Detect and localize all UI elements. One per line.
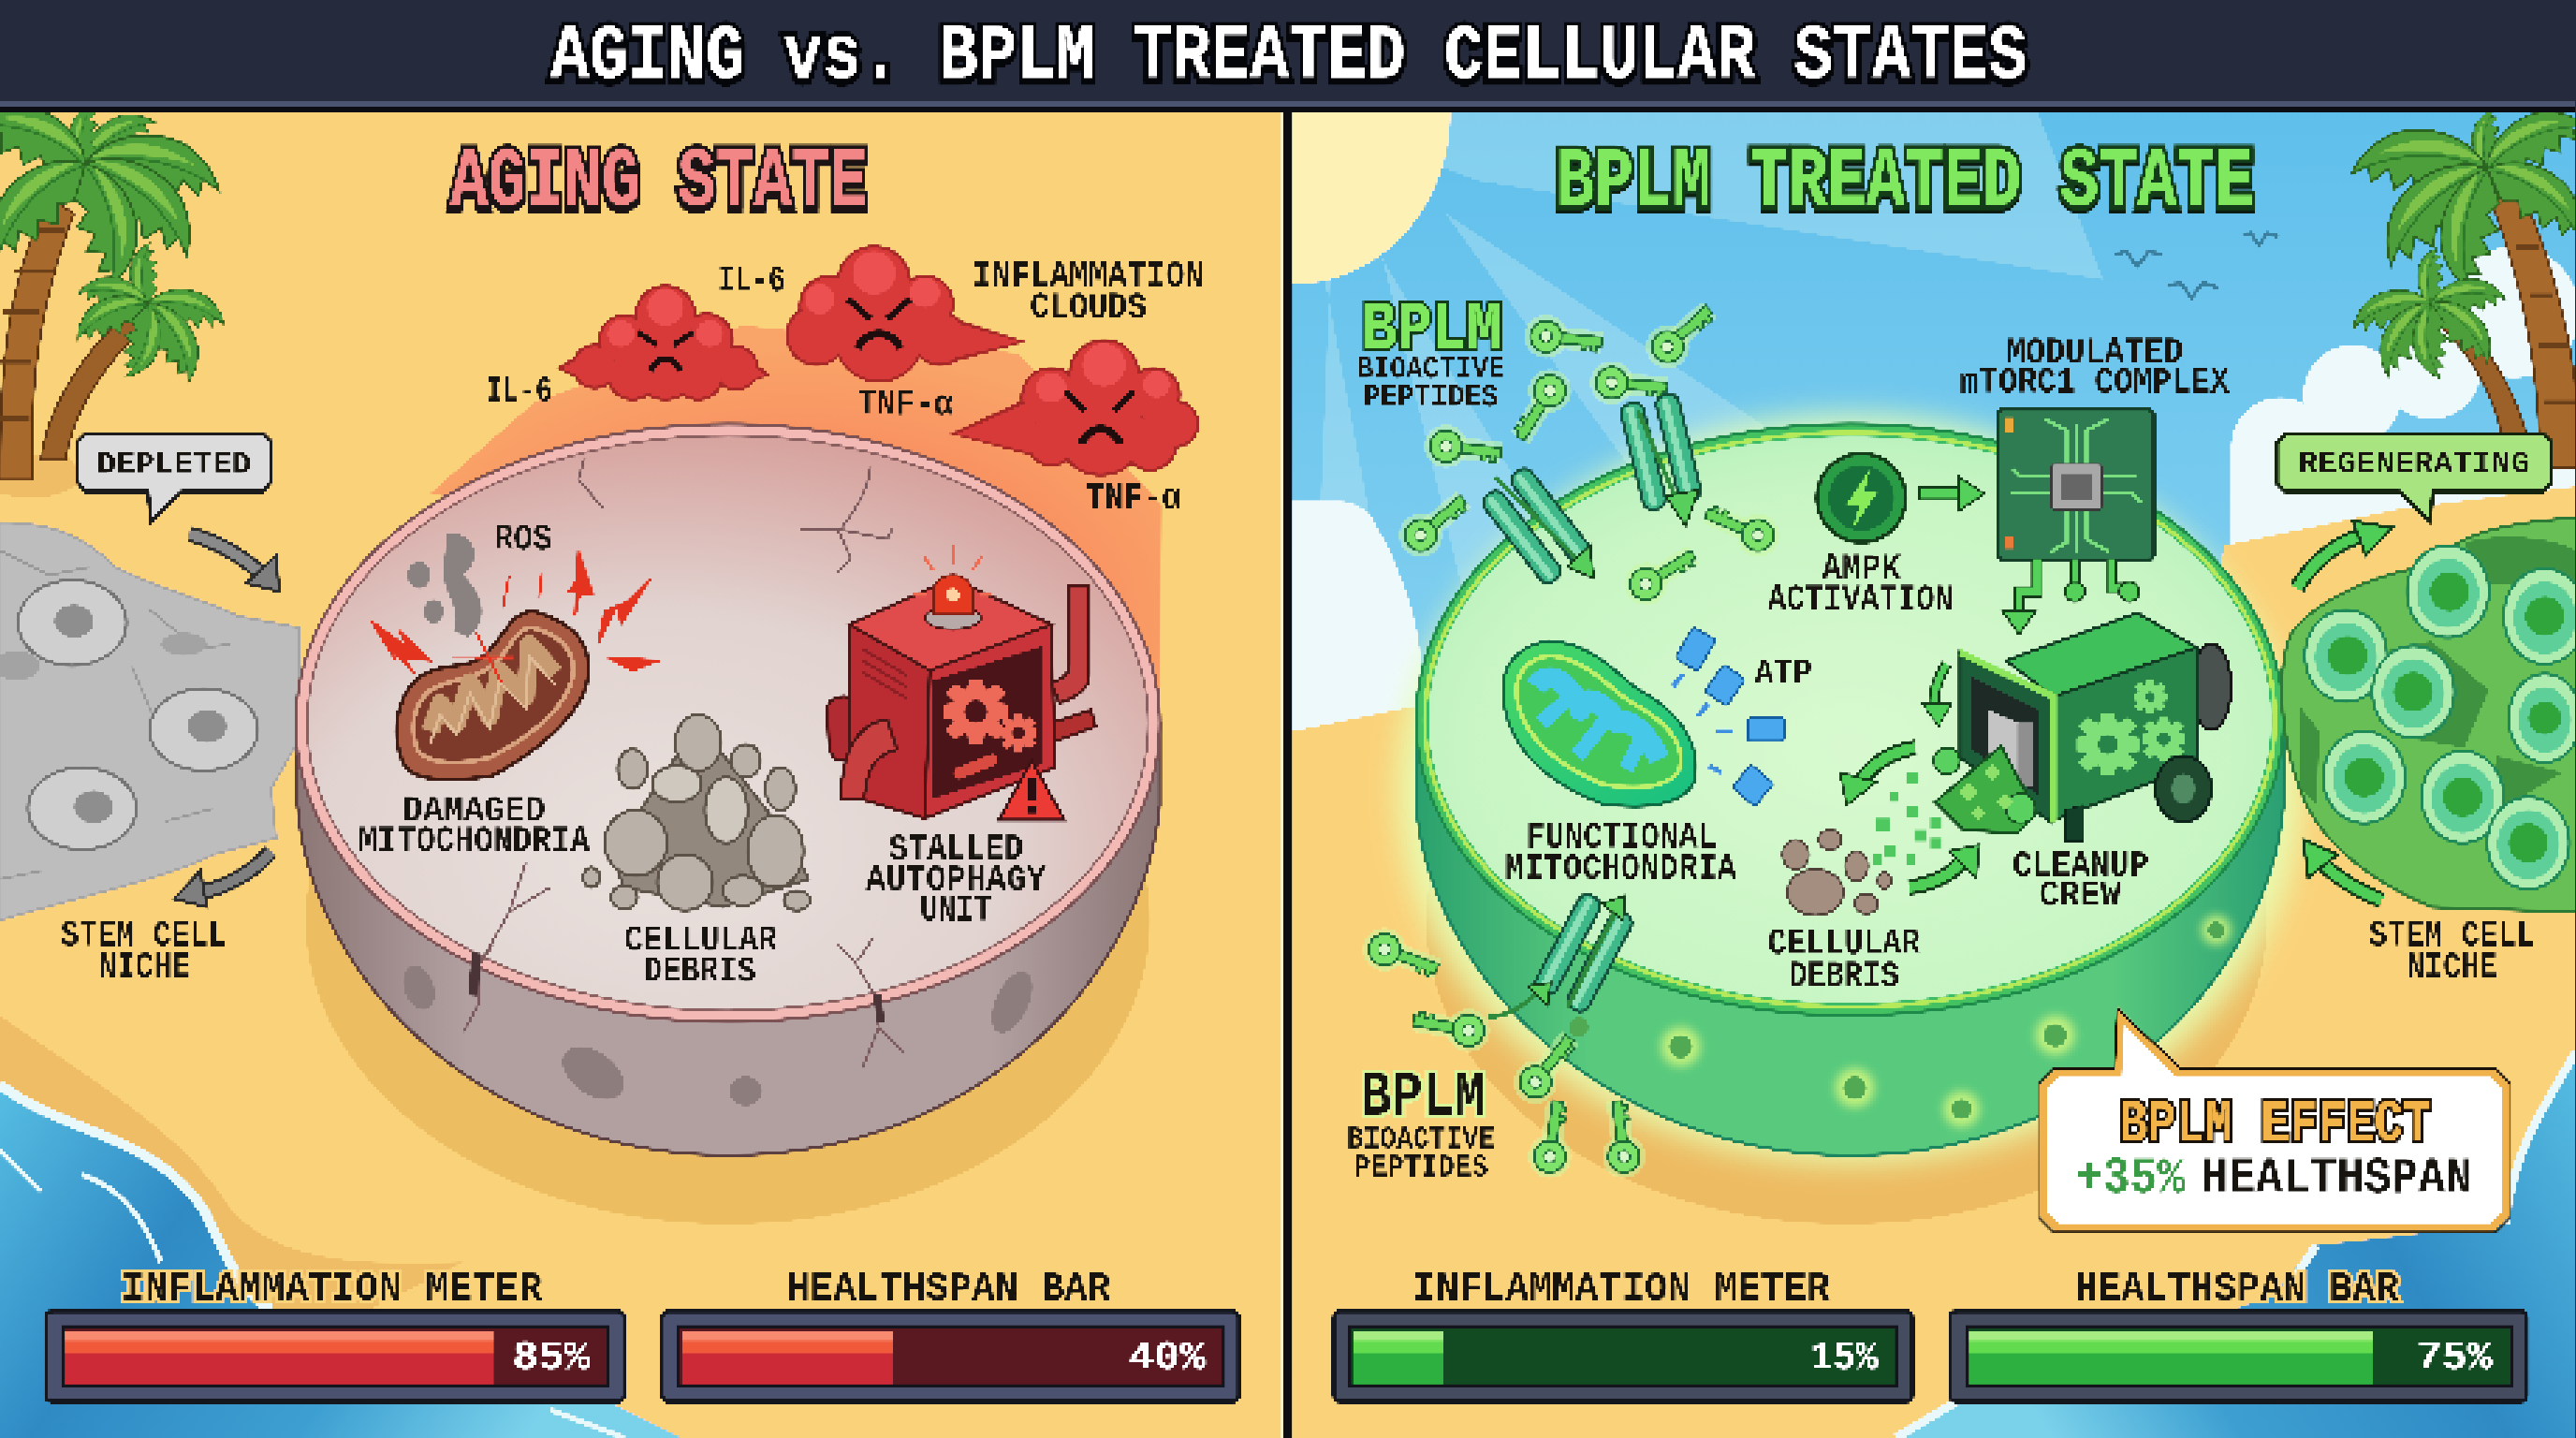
icon: inflammation cloud 2 [785, 245, 1027, 383]
callout: regenerating [2277, 433, 2552, 521]
callout: depleted [77, 433, 271, 521]
label: inflammation clouds: CLOUDS [1030, 287, 1147, 329]
label: bplm lower: BPLM [1360, 1063, 1486, 1134]
label: stem cell niche right: STEM CELL [2369, 916, 2535, 957]
inflammation meter right: INFLAMMATION METER [1412, 1266, 1831, 1313]
icon: ros smoke [407, 534, 482, 638]
label: cleanup crew: CLEANUP [2012, 846, 2149, 888]
label: stalled autophagy unit [866, 829, 1047, 932]
icon: palm trees right [2349, 93, 2576, 468]
inflammation meter right: 15% [1810, 1335, 1879, 1382]
inflammation glow [431, 326, 1162, 772]
clouds in sky [1293, 246, 2576, 731]
label: bplm lower: BIOACTIVE [1347, 1123, 1495, 1158]
callout: bplm effect [2039, 1009, 2510, 1232]
callout: regenerating: REGENERATING [2298, 448, 2530, 483]
icon: inflammation cloud 3 [949, 339, 1199, 477]
icon: cellular debris pile [583, 715, 810, 910]
label: cellular debris: CELLULAR [624, 920, 778, 961]
icon: warning triangle [999, 761, 1064, 820]
label: cellular debris [624, 920, 778, 992]
sand [1293, 487, 2576, 1438]
arrow: out of niche [174, 851, 271, 907]
label: damaged mitochondria: MITOCHONDRIA [359, 821, 591, 862]
icon: sparks [372, 550, 659, 682]
arrow: toward niche lower [2304, 840, 2382, 901]
cell: aging [296, 424, 1160, 1225]
title: AGING vs. BPLM TREATED CELLULAR STATES [550, 13, 2027, 101]
label: cellular debris right: DEBRIS [1789, 956, 1899, 997]
labels: cytokines [487, 261, 1182, 519]
label: bplm lower [1347, 1063, 1495, 1186]
label: inflammation clouds [973, 256, 1204, 329]
callout: depleted: DEPLETED [97, 448, 252, 484]
icons: peptide keys upper [1391, 294, 1786, 613]
label: stem cell niche [61, 916, 227, 988]
label: damaged mitochondria [359, 791, 591, 862]
arrow: ampk to mtorc1 [1919, 477, 1984, 511]
label: bplm lower: PEPTIDES [1354, 1151, 1488, 1186]
callout: bplm effect: BPLM EFFECT [2119, 1091, 2432, 1158]
label: cleanup crew: CREW [2039, 875, 2122, 917]
label: cellular debris: DEBRIS [644, 951, 755, 992]
cell glow and shadow [1398, 414, 2302, 1225]
healthspan bar: 40% [1129, 1335, 1207, 1382]
label: inflammation clouds: INFLAMMATION [973, 256, 1204, 297]
icon: birds [2115, 233, 2278, 298]
labels: cytokines: TNF-α [1086, 477, 1182, 519]
arrows: chip to cleanup crew [2002, 561, 2139, 635]
label: mtorc1: MODULATED [2006, 332, 2184, 374]
label: stem cell niche: NICHE [98, 946, 191, 988]
label: damaged mitochondria: DAMAGED [402, 791, 546, 832]
inflammation meter: 85% [513, 1335, 591, 1382]
heading: aging state: AGING STATE [450, 135, 868, 230]
label: functional mitochondria [1505, 817, 1737, 889]
icons: receptor channel lower [1488, 891, 1635, 1017]
particles: debris pixels [1873, 772, 1942, 864]
label: bplm upper: PEPTIDES [1364, 381, 1499, 417]
label: stalled autophagy unit: AUTOPHAGY [866, 859, 1047, 901]
icon: mtorc1 chip [1998, 409, 2154, 561]
heading: bplm treated state: BPLM TREATED STATE [1556, 135, 2254, 230]
icon: stalled autophagy unit [827, 546, 1096, 818]
label: atp: ATP [1754, 653, 1812, 695]
arrow: into niche [189, 534, 279, 592]
label: stem cell niche: STEM CELL [61, 916, 227, 957]
arrow: debris recycle left [1840, 748, 1915, 805]
panel: aging state [0, 86, 1283, 1438]
icon: functional mitochondrion [1503, 641, 1696, 806]
stem cell niche: grey [0, 522, 299, 920]
label: mtorc1: mTORC1 COMPLEX [1960, 362, 2230, 404]
labels: cytokines: IL-6 [718, 261, 785, 302]
label: cellular debris right: CELLULAR [1767, 924, 1921, 965]
label: cleanup crew [2012, 846, 2149, 917]
healthspan bar right: 75% [2417, 1335, 2493, 1382]
healthspan bar [662, 1266, 1238, 1401]
icons: peptide keys lower [1357, 922, 1647, 1181]
arrow: debris recycle right [1909, 844, 1980, 888]
cell: treated [1416, 424, 2284, 1155]
inflammation meter [46, 1266, 624, 1401]
callout: bplm effect: HEALTHSPAN [2202, 1151, 2472, 1208]
labels: cytokines: IL-6 [487, 371, 552, 412]
label: bplm upper: BIOACTIVE [1357, 353, 1505, 389]
label: stem cell niche right: NICHE [2407, 946, 2497, 988]
stem cell niche: green [2282, 518, 2576, 912]
icon: ampk [1817, 453, 1906, 542]
icons: debris chunks [1782, 829, 1891, 916]
label: stem cell niche right [2369, 916, 2535, 988]
label: bplm upper [1357, 292, 1505, 417]
callout: bplm effect: +35% [2075, 1151, 2186, 1208]
labels: cytokines: TNF-α [857, 384, 954, 425]
label: cellular debris right [1767, 924, 1921, 997]
label: mtorc1 [1960, 332, 2230, 404]
icon: palm trees left [0, 86, 228, 498]
icon: inflammation cloud 1 [555, 285, 770, 401]
icon: cleanup crew machine [1922, 613, 2231, 842]
label: stalled autophagy unit: STALLED [889, 829, 1023, 870]
icons: atp crystals [1673, 627, 1784, 806]
header bar [0, 0, 2576, 112]
icons: receptor channels upper [1479, 392, 1703, 587]
label: ros: ROS [494, 519, 552, 560]
label: ampk activation: ACTIVATION [1767, 580, 1954, 621]
arrow: toward niche upper [2297, 521, 2392, 588]
label: functional mitochondria: MITOCHONDRIA [1505, 848, 1737, 889]
healthspan bar right: HEALTHSPAN BAR [2075, 1266, 2399, 1313]
healthspan bar: HEALTHSPAN BAR [787, 1266, 1111, 1313]
label: ampk activation: AMPK [1822, 549, 1901, 590]
inflammation meter right [1334, 1266, 1912, 1401]
membrane vesicles [1569, 916, 2231, 1127]
inflammation meter: INFLAMMATION METER [122, 1266, 543, 1313]
healthspan bar right [1950, 1266, 2526, 1401]
label: bplm upper: BPLM [1362, 292, 1501, 370]
label: functional mitochondria: FUNCTIONAL [1526, 817, 1717, 858]
label: stalled autophagy unit: UNIT [920, 890, 992, 932]
panel: bplm treated state [1293, 93, 2576, 1438]
panel divider [1283, 111, 1293, 1438]
label: ampk activation [1767, 549, 1954, 621]
icon: damaged mitochondrion [397, 611, 589, 780]
sun and rays [1293, 111, 2103, 690]
